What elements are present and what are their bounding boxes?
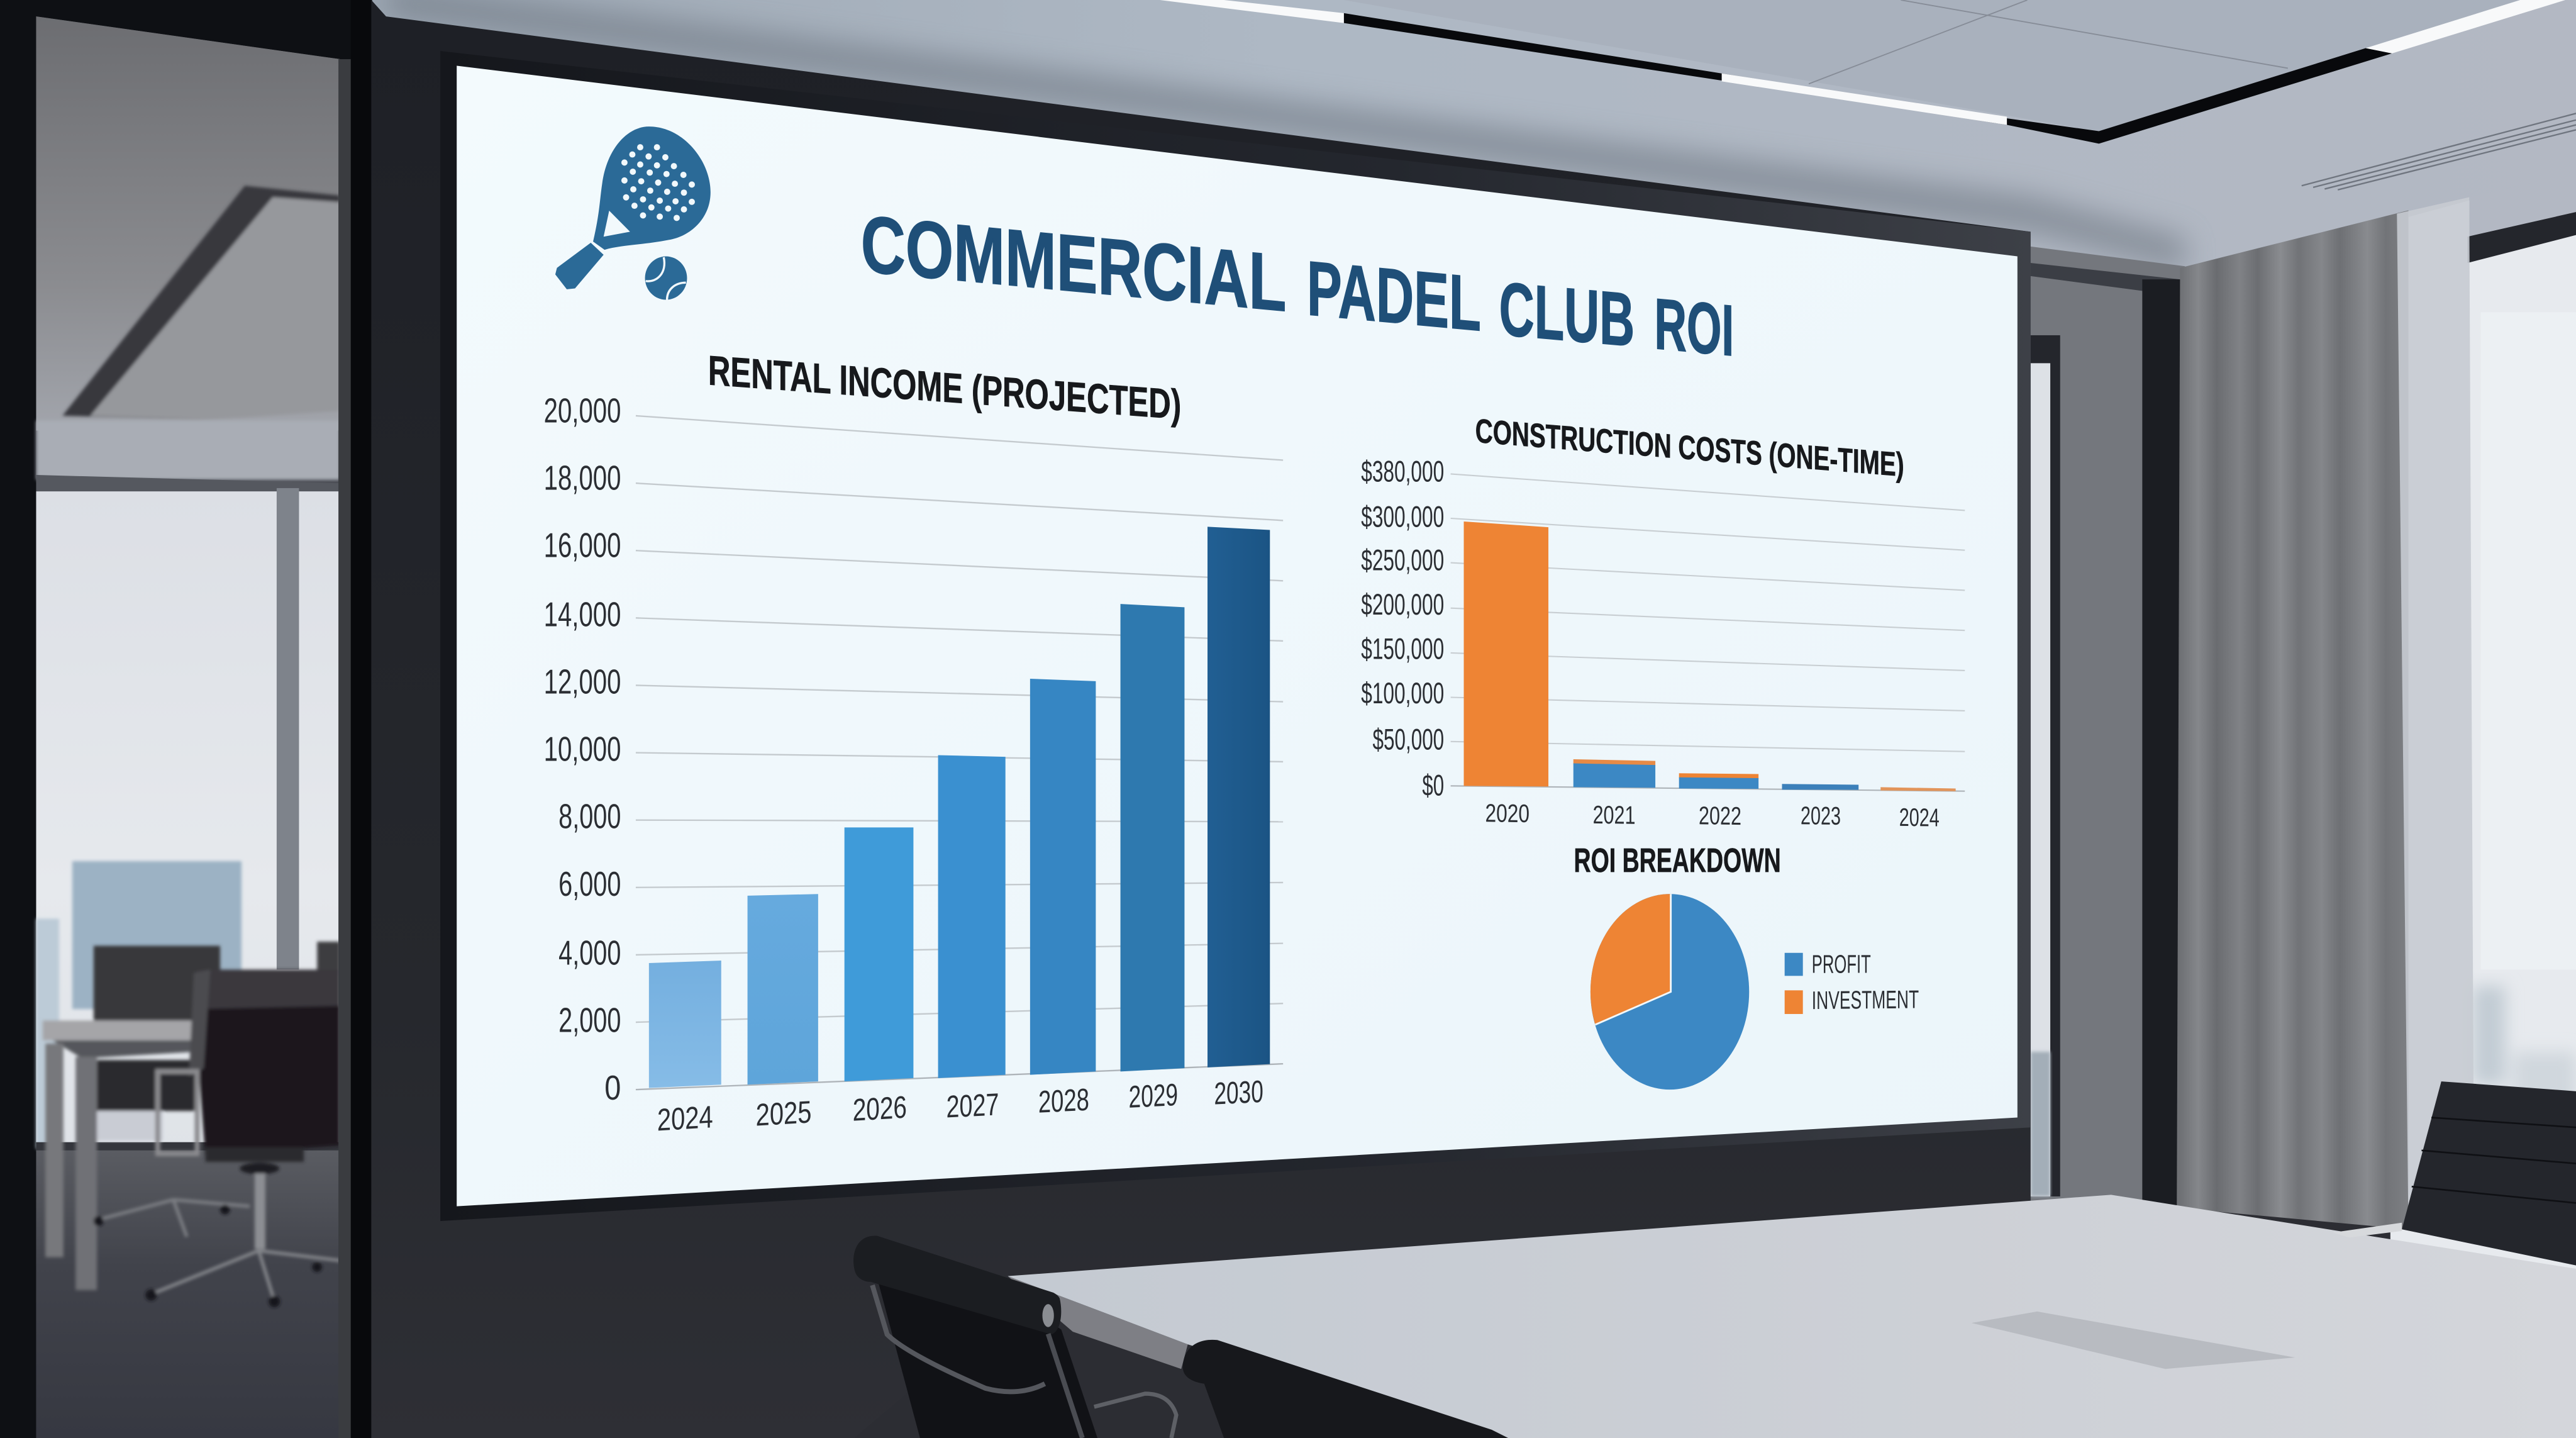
y axis labels: 10,000	[544, 730, 621, 769]
right chair	[2333, 1081, 2576, 1266]
wall-mounted screen bezel	[440, 51, 2031, 1221]
y axis labels: 12,000	[544, 662, 621, 701]
hallway and door opening	[2031, 247, 2185, 1208]
y axis labels: 16,000	[544, 526, 621, 565]
x axis labels: 2029	[1129, 1077, 1178, 1115]
legend: PROFIT	[1812, 950, 1871, 979]
x axis labels: 2023	[1801, 801, 1841, 830]
y axis labels: $50,000	[1373, 722, 1444, 755]
x axis labels	[1485, 798, 1940, 832]
y axis labels: 4,000	[558, 934, 621, 973]
y axis labels: 8,000	[558, 797, 621, 836]
reflected meeting table and chairs	[43, 942, 340, 1307]
title: COMMERCIAL	[861, 199, 1286, 329]
title: CLUB	[1499, 266, 1635, 363]
y axis labels: 14,000	[544, 594, 621, 633]
y axis labels	[544, 391, 621, 1107]
legend: INVESTMENT	[1812, 984, 1919, 1015]
y axis labels: 18,000	[544, 459, 621, 498]
x axis labels: 2025	[756, 1094, 811, 1133]
reflected window	[36, 491, 340, 1151]
bars	[649, 527, 1270, 1088]
x axis labels: 2024	[1899, 803, 1940, 832]
grey curtain	[2177, 198, 2474, 1229]
x axis labels: 2022	[1699, 801, 1741, 830]
y axis labels: 2,000	[558, 1001, 621, 1040]
y axis labels: $250,000	[1361, 543, 1444, 577]
icon: padel racket and ball	[555, 126, 711, 300]
y axis labels: $0	[1422, 768, 1444, 801]
heading: rental income: RENTAL INCOME (PROJECTED)	[708, 347, 1181, 428]
y axis labels: 6,000	[558, 864, 621, 903]
left glass partition reflection	[0, 0, 372, 1438]
x axis labels: 2028	[1038, 1082, 1089, 1120]
title	[861, 199, 1734, 371]
y axis labels	[1361, 454, 1444, 801]
ceiling vent	[2302, 113, 2576, 190]
x axis labels: 2027	[947, 1086, 999, 1125]
foreground chair right	[1183, 1340, 1508, 1438]
x axis labels	[657, 1074, 1263, 1137]
title: PADEL	[1307, 245, 1481, 348]
bars	[1464, 521, 1956, 791]
room ceiling	[0, 0, 2576, 427]
dark feature wall	[371, 0, 2031, 1438]
panel: ROI breakdown pie chart	[1574, 842, 1919, 1090]
panel: construction costs bar chart	[1361, 412, 1965, 832]
conference table	[1008, 1195, 2576, 1438]
y axis labels: 0	[604, 1068, 621, 1107]
presentation screen	[457, 66, 2018, 1207]
legend	[1785, 950, 1919, 1015]
title: ROI	[1655, 284, 1734, 371]
y axis labels: $100,000	[1361, 676, 1444, 710]
y axis labels: 20,000	[544, 391, 621, 430]
x axis labels: 2024	[657, 1099, 713, 1137]
reflected ceiling fixture	[62, 186, 340, 421]
heading: construction costs: CONSTRUCTION COSTS (ONE-TIME)	[1475, 412, 1904, 484]
y axis labels: $200,000	[1361, 588, 1444, 621]
heading: ROI breakdown: ROI BREAKDOWN	[1574, 842, 1781, 879]
x axis labels: 2026	[853, 1090, 907, 1128]
y axis labels: $380,000	[1361, 454, 1444, 488]
pie slices	[1591, 894, 1749, 1090]
panel: rental income bar chart	[544, 347, 1283, 1137]
foreground chair left	[853, 1235, 1176, 1438]
y axis labels: $150,000	[1361, 632, 1444, 666]
right window with city view	[2390, 172, 2576, 1282]
x axis labels: 2021	[1593, 800, 1635, 830]
x axis labels: 2030	[1214, 1074, 1263, 1112]
y axis labels: $300,000	[1361, 499, 1444, 533]
x axis labels: 2020	[1485, 798, 1530, 828]
